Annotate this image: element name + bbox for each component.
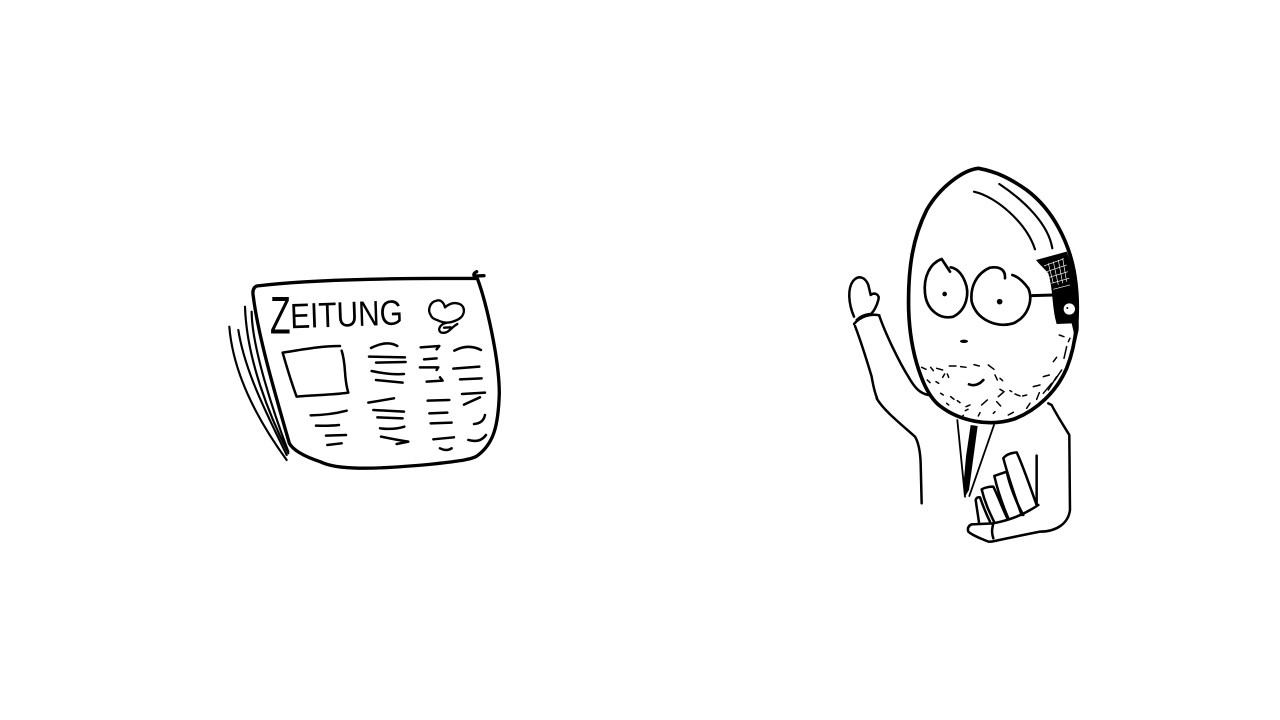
newspaper logo blob — [429, 300, 464, 333]
hair — [1036, 252, 1079, 342]
stubble — [922, 335, 1070, 417]
egg head outline — [909, 168, 1077, 423]
mouth — [969, 380, 983, 385]
newspaper title — [270, 286, 404, 345]
ear — [1063, 303, 1076, 315]
newspaper title: EITUNG — [290, 293, 404, 336]
right side of body and hand — [968, 403, 1070, 542]
torso — [877, 398, 1070, 542]
glasses — [925, 259, 1053, 325]
collar — [957, 420, 994, 497]
eyes — [942, 292, 1002, 304]
head and arm — [849, 168, 1079, 423]
newspaper back pages — [229, 307, 288, 460]
head highlights — [974, 184, 1052, 249]
tie — [963, 425, 978, 496]
icon: newspaper — [229, 272, 499, 468]
newspaper front page outline — [253, 272, 499, 468]
left side of body — [877, 398, 922, 503]
newspaper text lines — [311, 343, 486, 450]
newspaper title: Z — [270, 286, 291, 345]
icon: bar chart — [976, 452, 1038, 523]
raised arm and mitten — [849, 277, 928, 398]
character: egg-headed man — [849, 168, 1079, 542]
newspaper picture box — [283, 346, 348, 397]
nose — [960, 340, 968, 343]
